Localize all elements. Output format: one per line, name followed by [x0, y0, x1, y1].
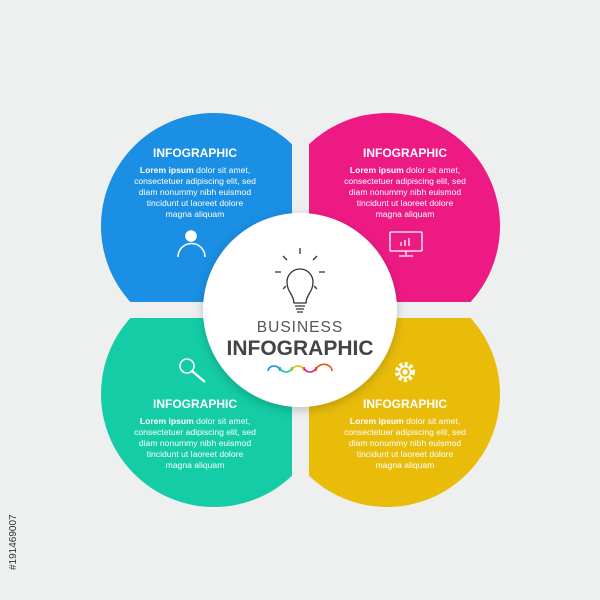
center circle — [203, 213, 397, 407]
heading pink: INFOGRAPHIC — [363, 146, 447, 160]
text block blue: Lorem ipsum dolor sit amet, — [140, 165, 250, 175]
text block teal: Lorem ipsum dolor sit amet, — [140, 416, 250, 426]
heading blue: INFOGRAPHIC — [153, 146, 237, 160]
text block pink: magna aliquam — [376, 209, 434, 219]
text block teal: consectetuer adipiscing elit, sed — [134, 427, 256, 437]
heading: infographic: INFOGRAPHIC — [226, 337, 374, 360]
icon: gear — [397, 364, 413, 380]
text block yellow: Lorem ipsum dolor sit amet, — [350, 416, 460, 426]
icon: light bulb — [275, 248, 325, 312]
icon: magnifier — [180, 359, 205, 382]
heading teal: INFOGRAPHIC — [153, 397, 237, 411]
text block blue: tincidunt ut laoreet dolore — [147, 198, 243, 208]
text block blue: diam nonummy nibh euismod — [139, 187, 251, 197]
text block yellow: diam nonummy nibh euismod — [349, 438, 461, 448]
panel: pink top-right — [309, 113, 500, 302]
heading yellow: INFOGRAPHIC — [363, 397, 447, 411]
text block yellow: consectetuer adipiscing elit, sed — [344, 427, 466, 437]
text block blue: consectetuer adipiscing elit, sed — [134, 176, 256, 186]
icon: person — [178, 231, 205, 257]
panel: yellow bottom-right — [309, 318, 500, 507]
text block yellow: magna aliquam — [376, 460, 434, 470]
text block pink: tincidunt ut laoreet dolore — [357, 198, 453, 208]
icon: monitor — [390, 232, 422, 256]
text block teal: magna aliquam — [166, 460, 224, 470]
panel: teal bottom-left — [101, 318, 292, 507]
text block teal: tincidunt ut laoreet dolore — [147, 449, 243, 459]
heading: business: BUSINESS — [257, 319, 343, 336]
text block pink: consectetuer adipiscing elit, sed — [344, 176, 466, 186]
wave decoration — [268, 364, 332, 372]
text block pink: Lorem ipsum dolor sit amet, — [350, 165, 460, 175]
panel: blue top-left — [101, 113, 292, 302]
text block pink: diam nonummy nibh euismod — [349, 187, 461, 197]
text block teal: diam nonummy nibh euismod — [139, 438, 251, 448]
stock id text: #191469007 — [8, 514, 19, 570]
text block blue: magna aliquam — [166, 209, 224, 219]
text block yellow: tincidunt ut laoreet dolore — [357, 449, 453, 459]
